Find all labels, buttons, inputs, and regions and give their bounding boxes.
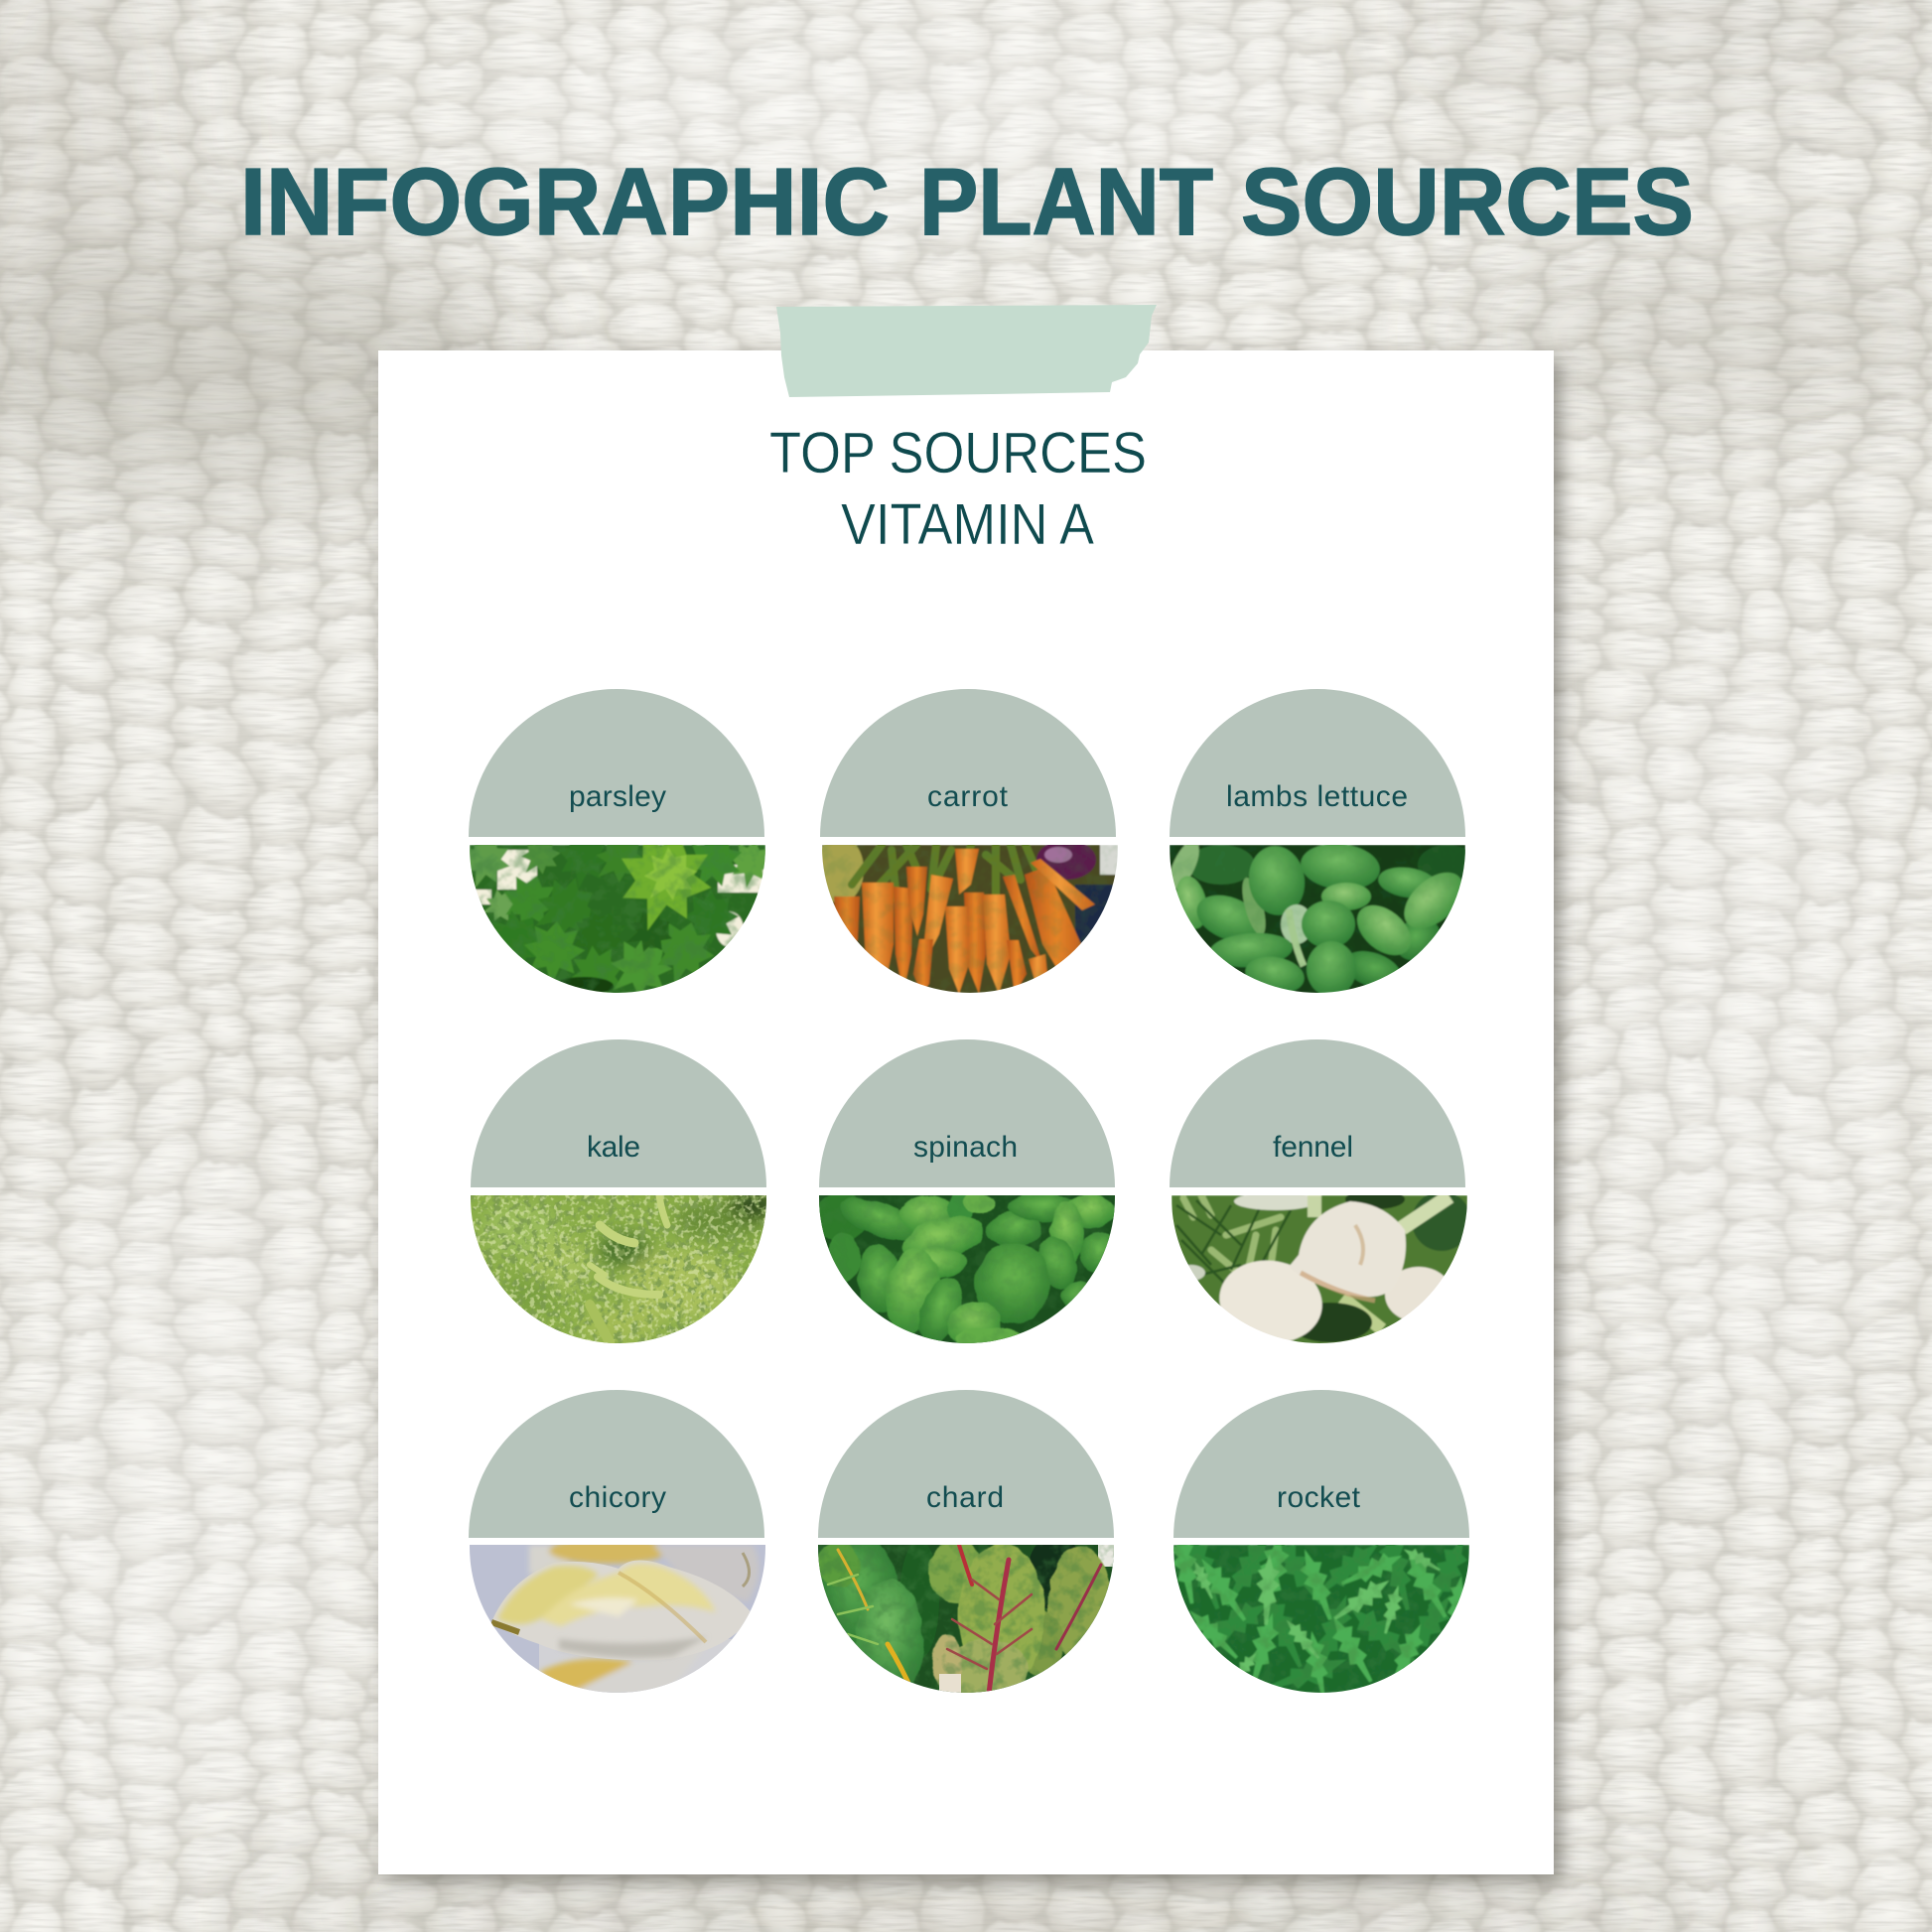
panel heading: VITAMIN A xyxy=(841,492,1094,557)
title: INFOGRAPHIC xyxy=(240,149,890,255)
paper shadow xyxy=(386,358,1562,1882)
card: chicory xyxy=(469,1390,765,1694)
washi tape xyxy=(776,305,1157,397)
card: fennel: fennel xyxy=(1273,1131,1353,1164)
card: rocket xyxy=(1167,1390,1476,1702)
card: fennel xyxy=(1170,1039,1471,1350)
card: spinach xyxy=(813,1039,1118,1349)
card: rocket: rocket xyxy=(1277,1481,1361,1514)
card: kale: kale xyxy=(587,1131,640,1164)
title: SOURCES xyxy=(1241,149,1694,255)
card: lambs lettuce: lambs lettuce xyxy=(1226,780,1408,813)
card: kale xyxy=(471,1039,778,1344)
card: carrot: carrot xyxy=(927,780,1009,813)
card: spinach: spinach xyxy=(913,1131,1018,1164)
card: chard: chard xyxy=(926,1481,1004,1514)
panel heading xyxy=(769,421,1147,557)
title xyxy=(240,149,1694,255)
card: chicory: chicory xyxy=(569,1481,666,1514)
title: PLANT xyxy=(919,149,1213,255)
paper sheet xyxy=(378,350,1554,1874)
card: parsley xyxy=(469,689,765,993)
card: lambs lettuce xyxy=(1164,689,1477,998)
card: chard xyxy=(816,1390,1114,1699)
panel heading: TOP SOURCES xyxy=(769,421,1147,485)
card: parsley: parsley xyxy=(569,780,666,813)
card: carrot xyxy=(816,689,1120,994)
